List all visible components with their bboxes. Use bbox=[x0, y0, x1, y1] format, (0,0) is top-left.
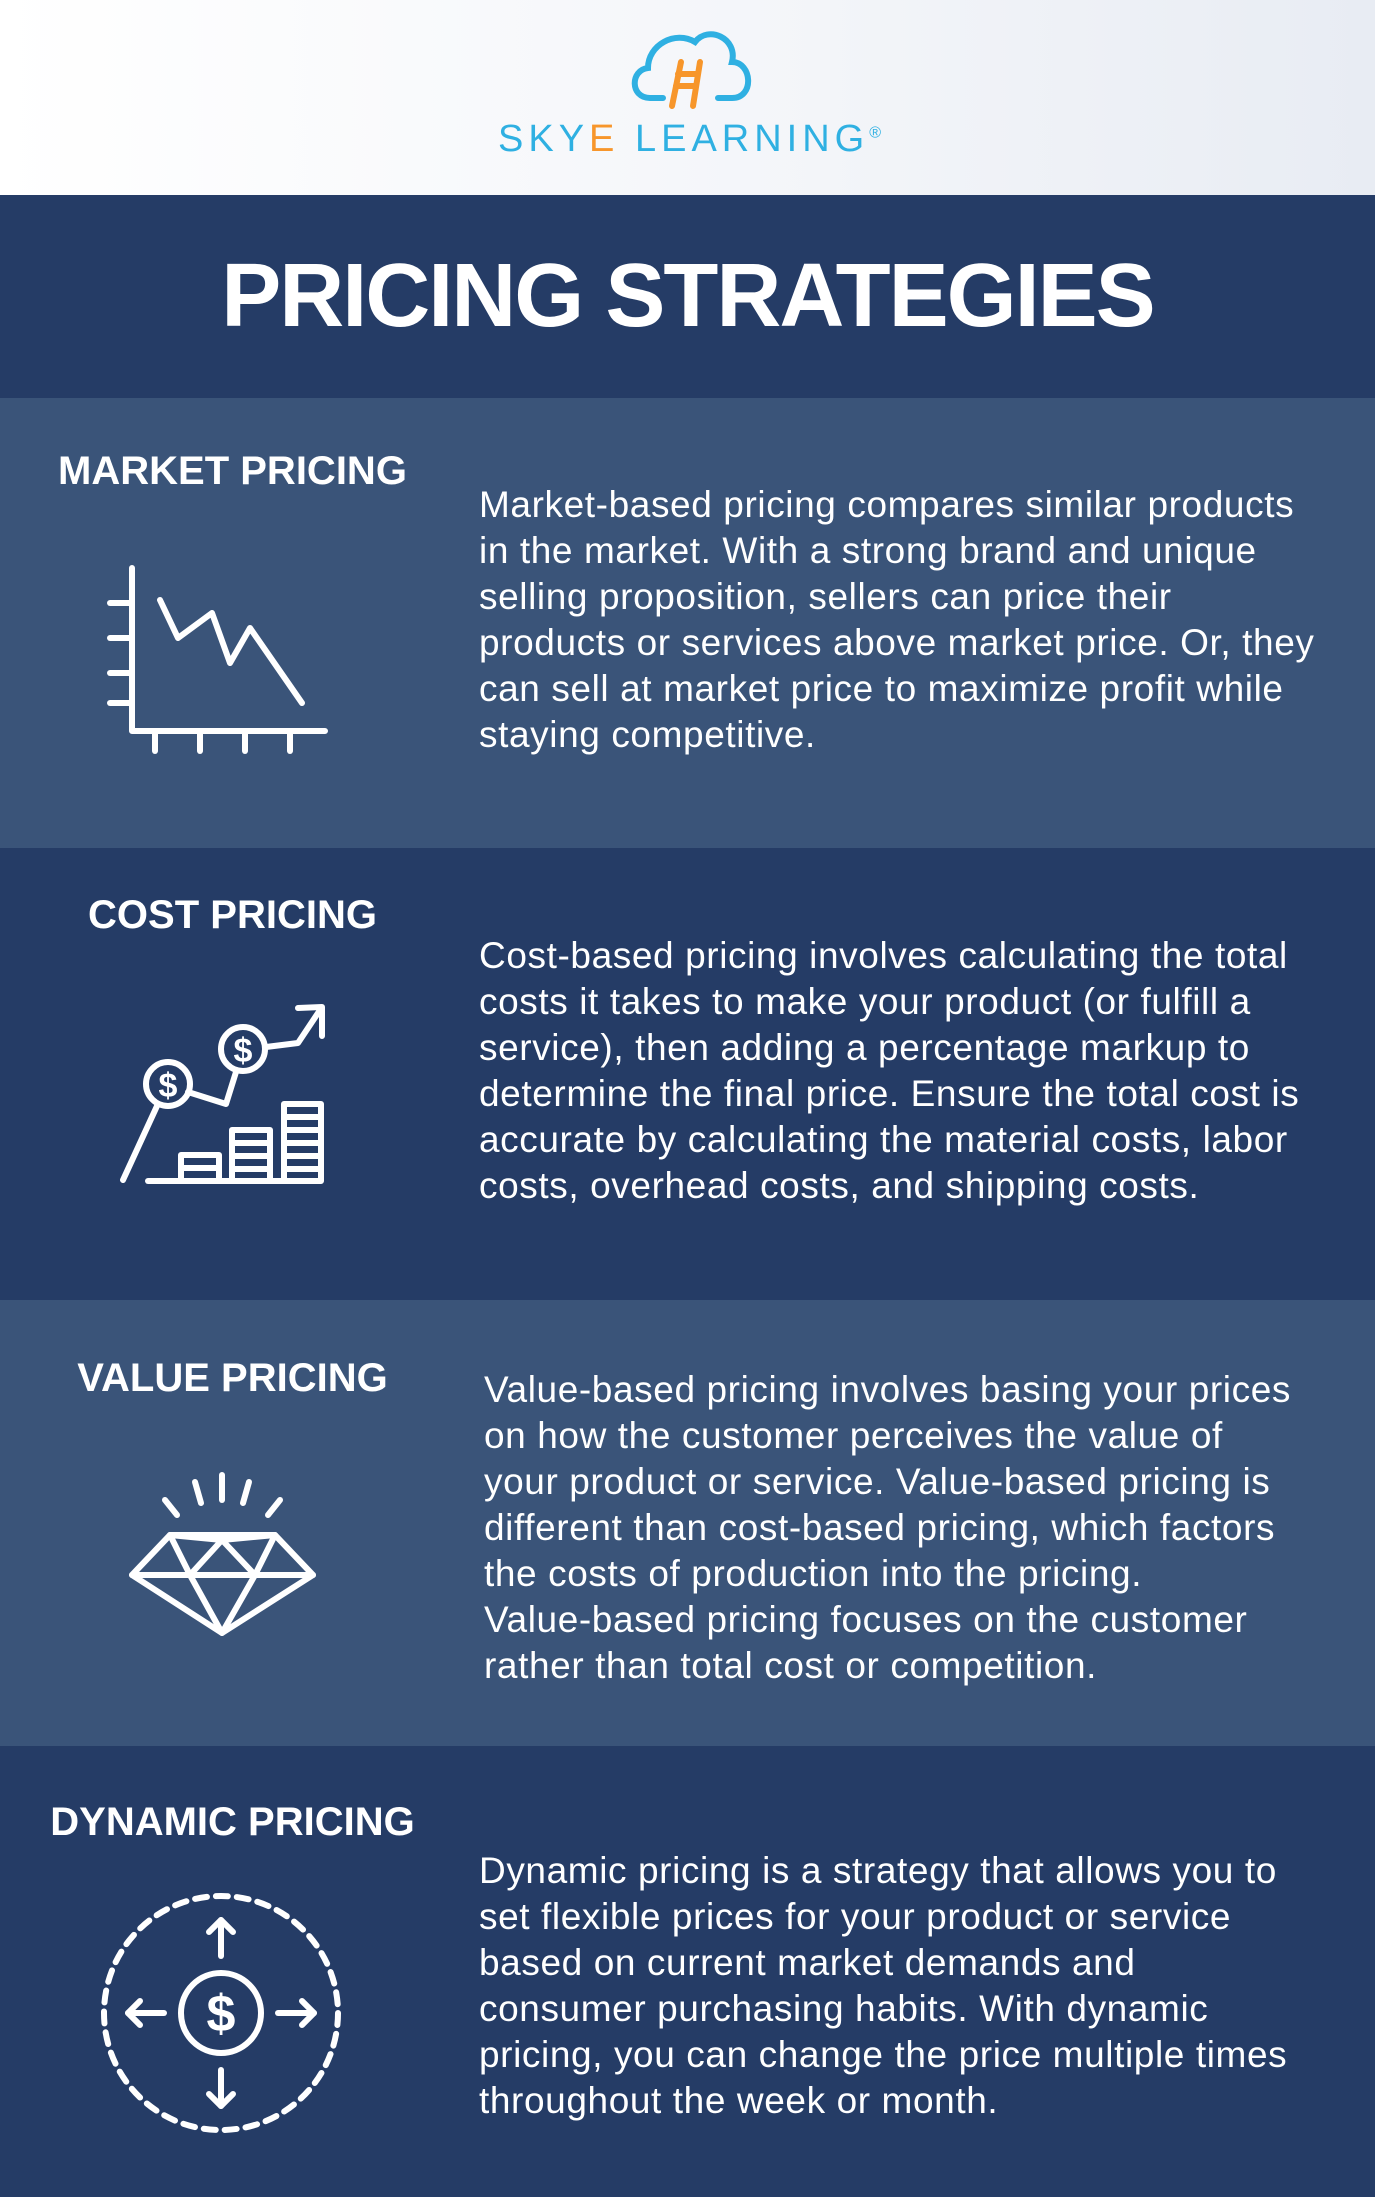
text block: Value-based pricing involves basing your prices bbox=[484, 1369, 1291, 1410]
icon: rising cost chart bbox=[120, 1004, 325, 1184]
header band bbox=[0, 0, 1375, 195]
heading: MARKET PRICING bbox=[58, 449, 407, 493]
icon: rising cost chart: $ bbox=[234, 1032, 253, 1070]
text block: set flexible prices for your product or service bbox=[479, 1896, 1231, 1937]
heading: COST PRICING bbox=[88, 893, 377, 937]
text block: determine the final price. Ensure the total cost is bbox=[479, 1073, 1299, 1114]
panel: value pricing bbox=[0, 1300, 1375, 1746]
text block: the costs of production into the pricing. bbox=[484, 1553, 1142, 1594]
icon: declining chart bbox=[107, 565, 328, 754]
text block: in the market. With a strong brand and unique bbox=[479, 530, 1257, 571]
heading: DYNAMIC PRICING bbox=[50, 1800, 415, 1844]
text block: your product or service. Value-based pricing is bbox=[484, 1461, 1270, 1502]
text block bbox=[479, 484, 1315, 755]
text block: staying competitive. bbox=[479, 714, 816, 755]
text block bbox=[484, 1369, 1291, 1686]
text block: on how the customer perceives the value of bbox=[484, 1415, 1223, 1456]
text block: products or services above market price. Or, they bbox=[479, 622, 1315, 663]
panel: dynamic pricing bbox=[0, 1746, 1375, 2197]
logo: SKYE LEARNING® bbox=[498, 118, 881, 160]
text block: Cost-based pricing involves calculating the total bbox=[479, 935, 1288, 976]
text block: accurate by calculating the material costs, labor bbox=[479, 1119, 1288, 1160]
text block: consumer purchasing habits. With dynamic bbox=[479, 1988, 1208, 2029]
title bbox=[0, 195, 1375, 398]
text block: Value-based pricing focuses on the customer bbox=[484, 1599, 1247, 1640]
text block: selling proposition, sellers can price their bbox=[479, 576, 1172, 617]
text block: service), then adding a percentage markup to bbox=[479, 1027, 1250, 1068]
icon: dynamic dollar bbox=[101, 1893, 341, 2133]
text block: can sell at market price to maximize profit while bbox=[479, 668, 1284, 709]
text block bbox=[479, 935, 1299, 1206]
text block: rather than total cost or competition. bbox=[484, 1645, 1097, 1686]
text block: pricing, you can change the price multiple times bbox=[479, 2034, 1287, 2075]
text block: costs it takes to make your product (or fulfill a bbox=[479, 981, 1251, 1022]
text block: Dynamic pricing is a strategy that allows you to bbox=[479, 1850, 1277, 1891]
text block: throughout the week or month. bbox=[479, 2080, 998, 2121]
title: PRICING STRATEGIES bbox=[221, 246, 1154, 346]
text block: Market-based pricing compares similar products bbox=[479, 484, 1294, 525]
icon: dynamic dollar: $ bbox=[207, 1985, 236, 2043]
panel: market pricing bbox=[0, 398, 1375, 848]
text block bbox=[479, 1850, 1287, 2121]
text block: costs, overhead costs, and shipping costs. bbox=[479, 1165, 1199, 1206]
text block: based on current market demands and bbox=[479, 1942, 1136, 1983]
heading: VALUE PRICING bbox=[77, 1356, 388, 1400]
icon: diamond bbox=[129, 1472, 316, 1636]
icon: rising cost chart: $ bbox=[159, 1067, 178, 1105]
logo bbox=[498, 31, 881, 160]
text block: different than cost-based pricing, which factors bbox=[484, 1507, 1275, 1548]
panel: cost pricing bbox=[0, 848, 1375, 1300]
